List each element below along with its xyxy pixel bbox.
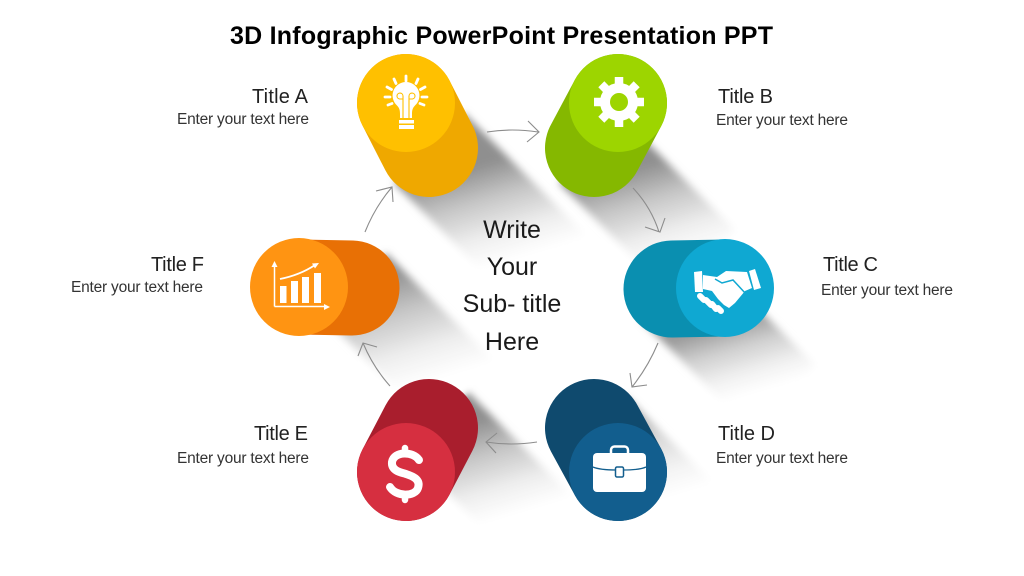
icon: gear (594, 77, 644, 127)
centre sub-title: Sub- title (463, 290, 561, 318)
arrow: E to F (358, 343, 390, 386)
label: Title F: Title F (151, 254, 204, 276)
label: Title D: Title D (718, 423, 775, 445)
cylinder F (250, 238, 352, 336)
arrow: A to B (487, 121, 539, 142)
label: Title D (716, 423, 848, 467)
label: Title D: Enter your text here (716, 450, 848, 467)
icon: light bulb (385, 76, 427, 129)
cylinder B (569, 54, 667, 152)
cylinder D (569, 423, 667, 521)
label: Title F (71, 254, 204, 296)
label: Title A: Enter your text here (177, 111, 309, 128)
arrow: D to E (486, 433, 537, 453)
label: Title A (177, 86, 309, 128)
shadow: cylinder C (641, 255, 815, 429)
cylinder E (357, 423, 455, 521)
label: Title B (716, 86, 848, 129)
shadow: cylinder A (394, 113, 585, 304)
centre sub-title: Your (487, 253, 537, 281)
label: Title C (821, 254, 953, 299)
icon: bar chart (272, 261, 330, 310)
shadow: cylinder F (323, 253, 496, 426)
arrow: F to A (365, 187, 393, 232)
arrow: C to D (630, 343, 658, 387)
label: Title C: Enter your text here (821, 282, 953, 299)
label: Title E: Enter your text here (177, 450, 309, 467)
cylinder A (357, 54, 455, 152)
centre sub-title (463, 216, 561, 356)
arrow: B to C (633, 188, 665, 232)
icon: briefcase (593, 446, 646, 492)
icon: dollar sign (390, 448, 419, 500)
centre sub-title: Write (483, 216, 541, 244)
centre sub-title: Here (485, 328, 539, 356)
icon: handshake (694, 269, 761, 311)
label: Title B: Title B (718, 86, 773, 108)
label: Title B: Enter your text here (716, 112, 848, 129)
label: Title C: Title C (823, 254, 878, 276)
label: Title E: Title E (254, 423, 308, 445)
label: Title E (177, 423, 309, 467)
shadow: cylinder E (406, 390, 578, 562)
title: 3D Infographic PowerPoint Presentation PPT (230, 22, 773, 50)
label: Title F: Enter your text here (71, 279, 203, 296)
shadow: cylinder B (559, 118, 735, 294)
shadow: cylinder D (566, 396, 735, 565)
cylinder C (672, 239, 774, 337)
label: Title A: Title A (252, 86, 309, 108)
